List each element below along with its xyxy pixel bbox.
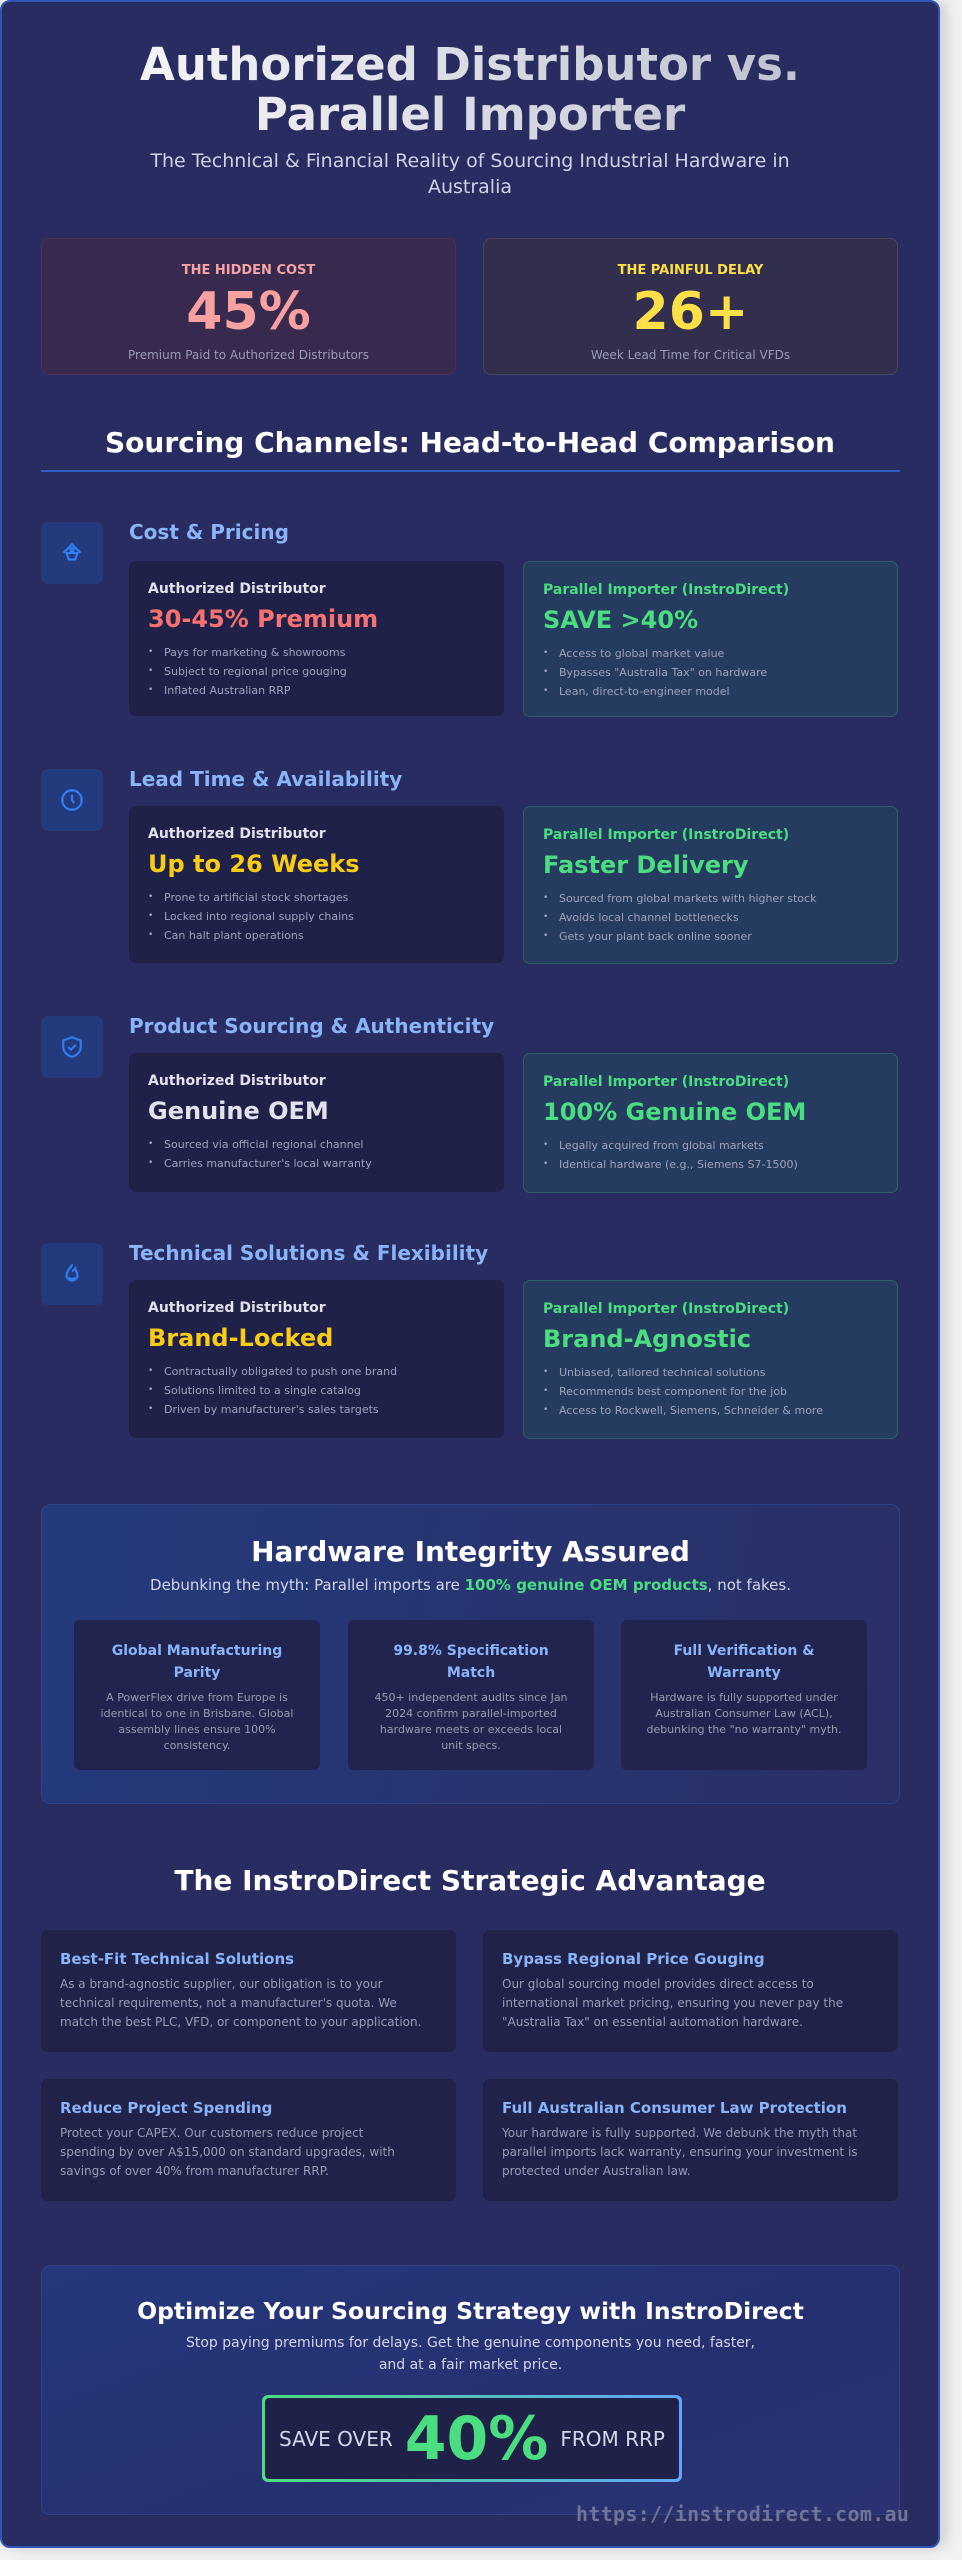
card: importer technical: Recommends best component for the job xyxy=(559,1385,787,1398)
card: best-fit: As a brand-agnostic supplier, our obligation is to your technical requirements, not a manufacturer's quota. We match the best PLC, VFD, or component to your application. xyxy=(60,1977,421,2029)
card: distributor lead: Authorized Distributor xyxy=(148,826,326,842)
card: distributor cost: Subject to regional price gouging xyxy=(164,665,347,678)
heading: technical solutions: Technical Solutions & Flexibility xyxy=(129,1241,488,1265)
stat: painful delay xyxy=(483,238,898,375)
text: debunk: Debunking the myth: Parallel imports are 100% genuine OEM products, not fakes. xyxy=(150,1576,791,1594)
panel: call to action xyxy=(41,2265,900,2515)
heading: hardware integrity: Hardware Integrity Assured xyxy=(251,1535,690,1568)
card: spec match xyxy=(348,1620,594,1770)
card: distributor cost: Pays for marketing & showrooms xyxy=(164,646,345,659)
card: bypass gouging xyxy=(483,1930,898,2052)
heading: product sourcing: Product Sourcing & Authenticity xyxy=(129,1014,494,1038)
url footer: https://instrodirect.com.au xyxy=(576,2502,909,2526)
card: distributor technical: Authorized Distributor xyxy=(148,1300,326,1316)
card: importer lead: Faster Delivery xyxy=(543,851,748,879)
stat: hidden cost: Premium Paid to Authorized Distributors xyxy=(128,348,369,362)
heading: lead time: Lead Time & Availability xyxy=(129,767,402,791)
heading: strategic advantage: The InstroDirect Strategic Advantage xyxy=(174,1864,766,1897)
card: importer sourcing: 100% Genuine OEM xyxy=(543,1098,806,1126)
card: importer lead: Gets your plant back online sooner xyxy=(559,930,752,943)
card: importer technical xyxy=(523,1280,898,1439)
card: importer technical: Unbiased, tailored technical solutions xyxy=(559,1366,765,1379)
card: distributor sourcing: Sourced via official regional channel xyxy=(164,1138,363,1151)
stat: painful delay: Week Lead Time for Critical VFDs xyxy=(591,348,790,362)
card: distributor technical: Solutions limited to a single catalog xyxy=(164,1384,361,1397)
section heading: comparison: Sourcing Channels: Head-to-Head Comparison xyxy=(105,426,835,459)
card: importer technical: Brand-Agnostic xyxy=(543,1325,751,1353)
card: importer cost: Lean, direct-to-engineer model xyxy=(559,685,730,698)
card: importer cost: SAVE >40% xyxy=(543,606,698,634)
card: distributor lead: Prone to artificial stock shortages xyxy=(164,891,348,904)
card: global parity: Global Manufacturing Parity xyxy=(112,1643,282,1681)
card: bypass gouging: Bypass Regional Price Gouging xyxy=(502,1950,765,1968)
text: cta: Stop paying premiums for delays. Get the genuine components you need, faster, and at a fair market price. xyxy=(186,2335,755,2373)
stat: hidden cost: 45% xyxy=(186,282,311,342)
card: distributor sourcing: Genuine OEM xyxy=(148,1097,329,1125)
card: distributor technical: Driven by manufacturer's sales targets xyxy=(164,1403,379,1416)
card: importer cost: Bypasses "Australia Tax" on hardware xyxy=(559,666,767,679)
badge: save 40%: 40% xyxy=(405,2404,548,2474)
card: distributor lead: Locked into regional supply chains xyxy=(164,910,354,923)
card: importer technical: Parallel Importer (InstroDirect) xyxy=(543,1301,789,1317)
card: consumer law xyxy=(483,2079,898,2201)
heading: cost & pricing: Cost & Pricing xyxy=(129,520,289,544)
card: global parity xyxy=(74,1620,320,1770)
card: consumer law: Your hardware is fully supported. We debunk the myth that parallel imports lack warranty, ensuring your investment is protected under Australian law. xyxy=(502,2126,858,2178)
card: importer lead: Sourced from global markets with higher stock xyxy=(559,892,816,905)
icon: price tag xyxy=(41,522,103,584)
badge: save 40% xyxy=(262,2395,682,2482)
card: consumer law: Full Australian Consumer Law Protection xyxy=(502,2099,847,2117)
card: importer sourcing xyxy=(523,1053,898,1193)
subtitle: The Technical & Financial Reality of Sourcing Industrial Hardware in Australia xyxy=(150,150,790,198)
badge: save 40%: FROM RRP xyxy=(560,2426,665,2450)
heading: cta: Optimize Your Sourcing Strategy with InstroDirect xyxy=(137,2297,804,2325)
card: warranty: Full Verification & Warranty xyxy=(674,1643,814,1681)
card: importer lead: Avoids local channel bottlenecks xyxy=(559,911,739,924)
card: importer technical: Access to Rockwell, Siemens, Schneider & more xyxy=(559,1404,823,1417)
icon: flame xyxy=(41,1243,103,1305)
icon: clock xyxy=(41,769,103,831)
card: importer cost: Parallel Importer (InstroDirect) xyxy=(543,582,789,598)
card: importer sourcing: Identical hardware (e.g., Siemens S7-1500) xyxy=(559,1158,798,1171)
card: distributor technical xyxy=(129,1280,504,1438)
stat: painful delay: 26+ xyxy=(633,282,748,342)
card: importer cost xyxy=(523,561,898,717)
card: reduce spending xyxy=(41,2079,456,2201)
card: distributor lead xyxy=(129,806,504,963)
card: spec match: 99.8% Specification Match xyxy=(393,1643,549,1681)
card: warranty: Hardware is fully supported under Australian Consumer Law (ACL), debunking the "no warranty" myth. xyxy=(646,1691,842,1736)
card: distributor cost: Inflated Australian RRP xyxy=(164,684,290,697)
card: best-fit: Best-Fit Technical Solutions xyxy=(60,1950,294,1968)
card: distributor sourcing: Authorized Distributor xyxy=(148,1073,326,1089)
card: distributor technical: Brand-Locked xyxy=(148,1324,333,1352)
card: distributor lead: Up to 26 Weeks xyxy=(148,850,360,878)
card: distributor cost: 30-45% Premium xyxy=(148,605,378,633)
panel: hardware integrity xyxy=(41,1504,900,1804)
card: best-fit xyxy=(41,1930,456,2052)
card: distributor cost: Authorized Distributor xyxy=(148,581,326,597)
title: Authorized Distributor vs. xyxy=(140,38,800,91)
card: spec match: 450+ independent audits since Jan 2024 confirm parallel-imported hardware meets or exceeds local unit specs. xyxy=(374,1691,568,1752)
card: distributor sourcing xyxy=(129,1053,504,1192)
stat: hidden cost xyxy=(41,238,456,375)
card: importer sourcing: Legally acquired from global markets xyxy=(559,1139,764,1152)
card: distributor sourcing: Carries manufacturer's local warranty xyxy=(164,1157,372,1170)
card: distributor technical: Contractually obligated to push one brand xyxy=(164,1365,397,1378)
icon: shield xyxy=(41,1016,103,1078)
card: importer cost: Access to global market value xyxy=(559,647,724,660)
card: importer sourcing: Parallel Importer (InstroDirect) xyxy=(543,1074,789,1090)
card: warranty xyxy=(621,1620,867,1770)
card: distributor lead: Can halt plant operations xyxy=(164,929,304,942)
title xyxy=(2,40,938,140)
stat: hidden cost: THE HIDDEN COST xyxy=(182,263,315,278)
badge: save 40%: SAVE OVER xyxy=(279,2426,393,2450)
stat: painful delay: THE PAINFUL DELAY xyxy=(618,263,763,278)
card: importer lead: Parallel Importer (InstroDirect) xyxy=(543,827,789,843)
card: bypass gouging: Our global sourcing model provides direct access to international market pricing, ensuring you never pay the "Australia Tax" on essential automation hardware. xyxy=(502,1977,843,2029)
card: reduce spending: Reduce Project Spending xyxy=(60,2099,272,2117)
card: global parity: A PowerFlex drive from Europe is identical to one in Brisbane. Global assembly lines ensure 100% consistency. xyxy=(101,1691,293,1752)
card: distributor cost xyxy=(129,561,504,716)
card: importer lead xyxy=(523,806,898,964)
card: reduce spending: Protect your CAPEX. Our customers reduce project spending by over A$15,000 on standard upgrades, with savings of over 40% from manufacturer RRP. xyxy=(60,2126,395,2178)
title: Parallel Importer xyxy=(255,88,685,141)
